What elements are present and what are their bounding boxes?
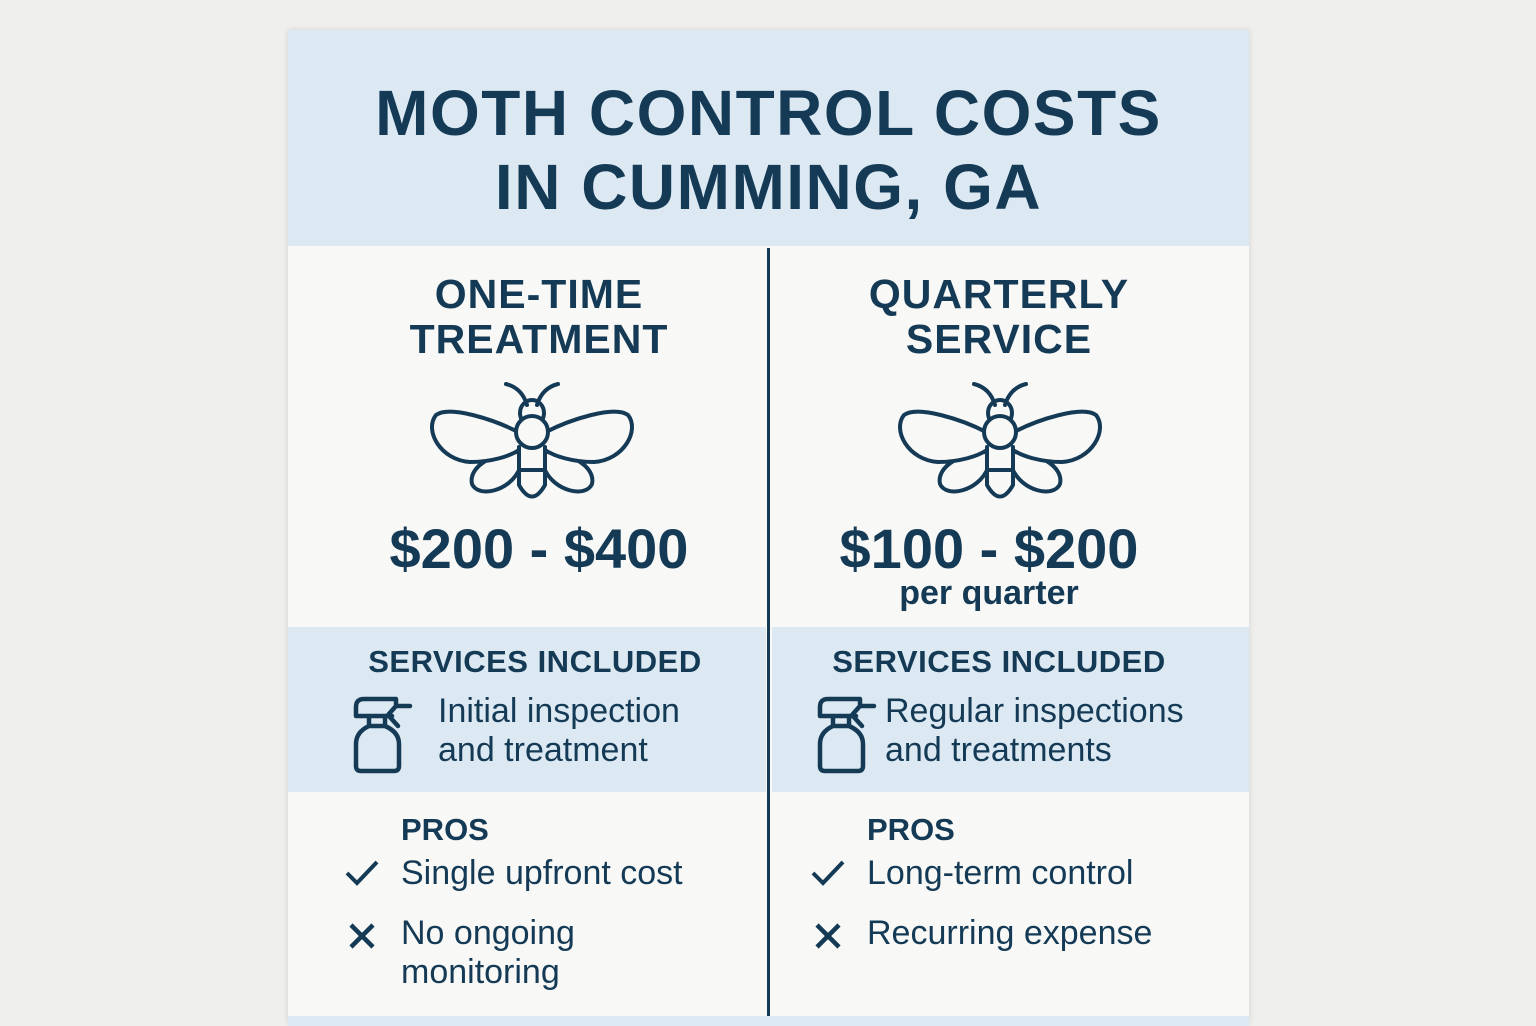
pro text right: Long-term control bbox=[867, 854, 1133, 892]
heading: one-time: ONE-TIME bbox=[435, 271, 643, 317]
icon: moth left bbox=[430, 382, 634, 498]
services text left: and treatment bbox=[438, 731, 648, 769]
pros left bbox=[346, 812, 683, 991]
icon: check bbox=[346, 860, 378, 886]
services heading left: SERVICES INCLUDED bbox=[368, 644, 702, 679]
price left: $200 - $400 bbox=[390, 517, 688, 580]
divider bbox=[767, 248, 770, 1016]
services text left: Initial inspection bbox=[438, 692, 680, 730]
card bbox=[288, 30, 1249, 1024]
bottom band bbox=[288, 1016, 1249, 1026]
services text left bbox=[438, 692, 680, 769]
header band bbox=[288, 30, 1249, 246]
pros heading right: PROS bbox=[867, 812, 955, 847]
services band left bbox=[288, 627, 766, 792]
icon: moth right bbox=[898, 382, 1102, 498]
services band right bbox=[772, 627, 1249, 792]
icon: spray bottle right bbox=[818, 696, 876, 774]
services text right: Regular inspections bbox=[885, 692, 1184, 730]
heading: quarterly: QUARTERLY bbox=[869, 271, 1129, 317]
services heading right: SERVICES INCLUDED bbox=[832, 644, 1166, 679]
heading: quarterly: SERVICE bbox=[906, 316, 1092, 362]
con text left: No ongoing bbox=[401, 914, 575, 952]
price right: $100 - $200 bbox=[840, 517, 1138, 580]
services right bbox=[818, 644, 1184, 774]
pros heading left: PROS bbox=[401, 812, 489, 847]
icon: cross bbox=[816, 923, 840, 949]
services text right: and treatments bbox=[885, 731, 1112, 769]
title: MOTH CONTROL COSTS bbox=[375, 77, 1162, 149]
heading: one-time: TREATMENT bbox=[410, 316, 668, 362]
icon: cross bbox=[350, 923, 374, 949]
icon: check bbox=[812, 860, 844, 886]
icon: spray bottle left bbox=[354, 696, 412, 774]
pro text left: Single upfront cost bbox=[401, 854, 683, 892]
pros right bbox=[812, 812, 1152, 952]
services left bbox=[354, 644, 702, 774]
services text right bbox=[885, 692, 1184, 769]
con text right: Recurring expense bbox=[867, 914, 1152, 952]
title bbox=[375, 77, 1162, 223]
heading: quarterly bbox=[869, 271, 1129, 362]
price right: per quarter bbox=[899, 574, 1079, 612]
con text left bbox=[401, 914, 575, 991]
heading: one-time bbox=[410, 271, 668, 362]
price right bbox=[840, 517, 1138, 612]
title: IN CUMMING, GA bbox=[495, 151, 1042, 223]
con text left: monitoring bbox=[401, 953, 560, 991]
